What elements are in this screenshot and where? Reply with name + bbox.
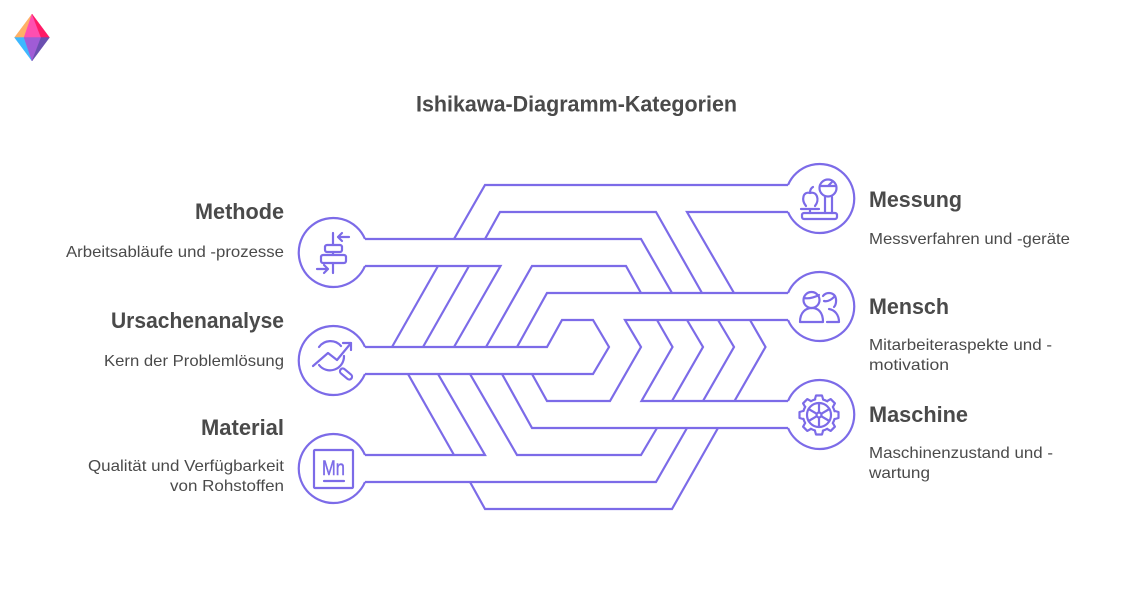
icon: Methode alignment [317, 233, 349, 273]
label: Ursachenanalyse: Ursachenanalyse [111, 308, 284, 333]
label: Material: von Rohstoffen [170, 478, 284, 495]
label: Material [88, 415, 285, 495]
label: Methode: Methode [195, 199, 284, 224]
label: Maschine: wartung [868, 465, 930, 482]
label: Mensch: Mensch [869, 294, 949, 319]
icon: Material element tile [314, 450, 353, 488]
label: Methode: Arbeitsabläufe und -prozesse [66, 244, 284, 261]
circle: Mensch [788, 272, 854, 341]
icon: Maschine gear wheel [800, 396, 838, 434]
label: Maschine: Maschinenzustand und - [869, 445, 1053, 462]
icon: Ursachenanalyse chart and magnifier [313, 341, 353, 381]
circle: Maschine [788, 380, 854, 449]
icon: Material element tile: Mn [322, 457, 345, 480]
label: Ursachenanalyse [104, 308, 284, 370]
icon: Messung scale [801, 180, 837, 219]
label: Mensch [869, 294, 1052, 374]
label: Messung [869, 187, 1070, 248]
title: Ishikawa-Diagramm-Kategorien [416, 92, 737, 116]
label: Maschine [868, 402, 1053, 482]
label: Material: Qualität und Verfügbarkeit [88, 458, 285, 475]
circle: Material [299, 434, 365, 503]
circle: Methode [299, 218, 365, 287]
fishbone connector lines [365, 185, 788, 509]
circle: Messung [788, 164, 854, 233]
label: Messung: Messung [869, 187, 962, 212]
label: Methode [66, 199, 284, 261]
label: Material: Material [201, 415, 284, 440]
icon: Mensch people [800, 292, 839, 322]
circle: Ursachenanalyse [299, 326, 365, 395]
label: Mensch: motivation [869, 357, 949, 374]
label: Ursachenanalyse: Kern der Problemlösung [104, 353, 284, 370]
logo [14, 14, 50, 61]
label: Messung: Messverfahren und -geräte [869, 231, 1070, 248]
label: Maschine: Maschine [869, 402, 968, 427]
label: Mensch: Mitarbeiteraspekte und - [869, 337, 1052, 354]
